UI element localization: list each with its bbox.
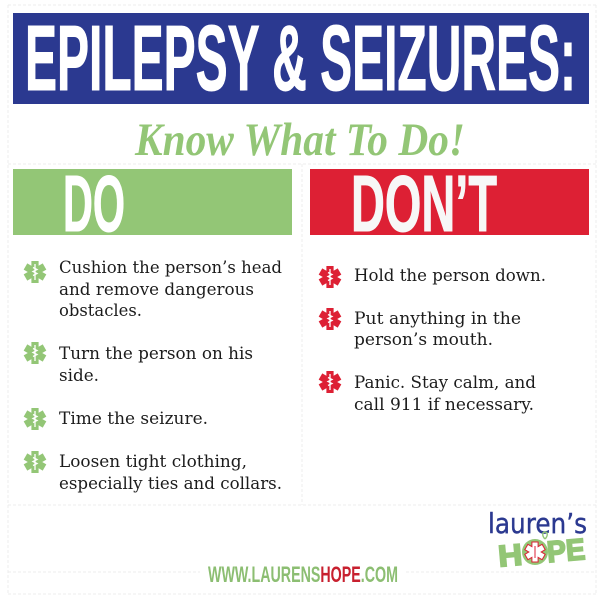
don't item: hold: Hold the person down. xyxy=(354,266,546,285)
do item: time: Time the seizure. xyxy=(59,409,208,428)
don't item: put xyxy=(319,308,521,349)
don't item: panic xyxy=(319,371,536,414)
website url: WWW.LAURENSHOPE.COM xyxy=(208,562,398,587)
logo star xyxy=(522,532,548,565)
do item: turn: Turn the person on his xyxy=(59,344,253,363)
do heading xyxy=(13,159,292,248)
do item: turn: side. xyxy=(59,366,99,385)
panel: don't xyxy=(310,159,589,414)
don't item: put: Put anything in the xyxy=(354,309,521,328)
logo xyxy=(488,507,587,574)
don't heading: DON’T xyxy=(351,159,497,248)
don't item: panic: call 911 if necessary. xyxy=(354,395,534,414)
do item: cushion xyxy=(24,258,282,320)
logo hope wordmark: PE xyxy=(546,533,586,569)
do item: cushion: and remove dangerous xyxy=(59,280,254,299)
logo: lauren’s xyxy=(488,507,587,540)
do heading: DO xyxy=(63,159,125,248)
don't item: put: person’s mouth. xyxy=(354,330,493,349)
logo hope wordmark xyxy=(497,533,586,574)
do item: cushion: Cushion the person’s head xyxy=(59,258,282,277)
do item: time xyxy=(24,408,208,430)
subtitle: Know What To Do! xyxy=(134,114,465,166)
don't item: panic: Panic. Stay calm, and xyxy=(354,373,536,392)
do item: loosen: Loosen tight clothing, xyxy=(59,452,247,471)
do item: loosen: especially ties and collars. xyxy=(59,474,282,493)
panel: do xyxy=(13,159,292,493)
do item: cushion: obstacles. xyxy=(59,301,142,320)
do item: loosen xyxy=(24,451,282,493)
do item: turn xyxy=(24,342,253,385)
logo hope wordmark: H xyxy=(497,539,524,574)
